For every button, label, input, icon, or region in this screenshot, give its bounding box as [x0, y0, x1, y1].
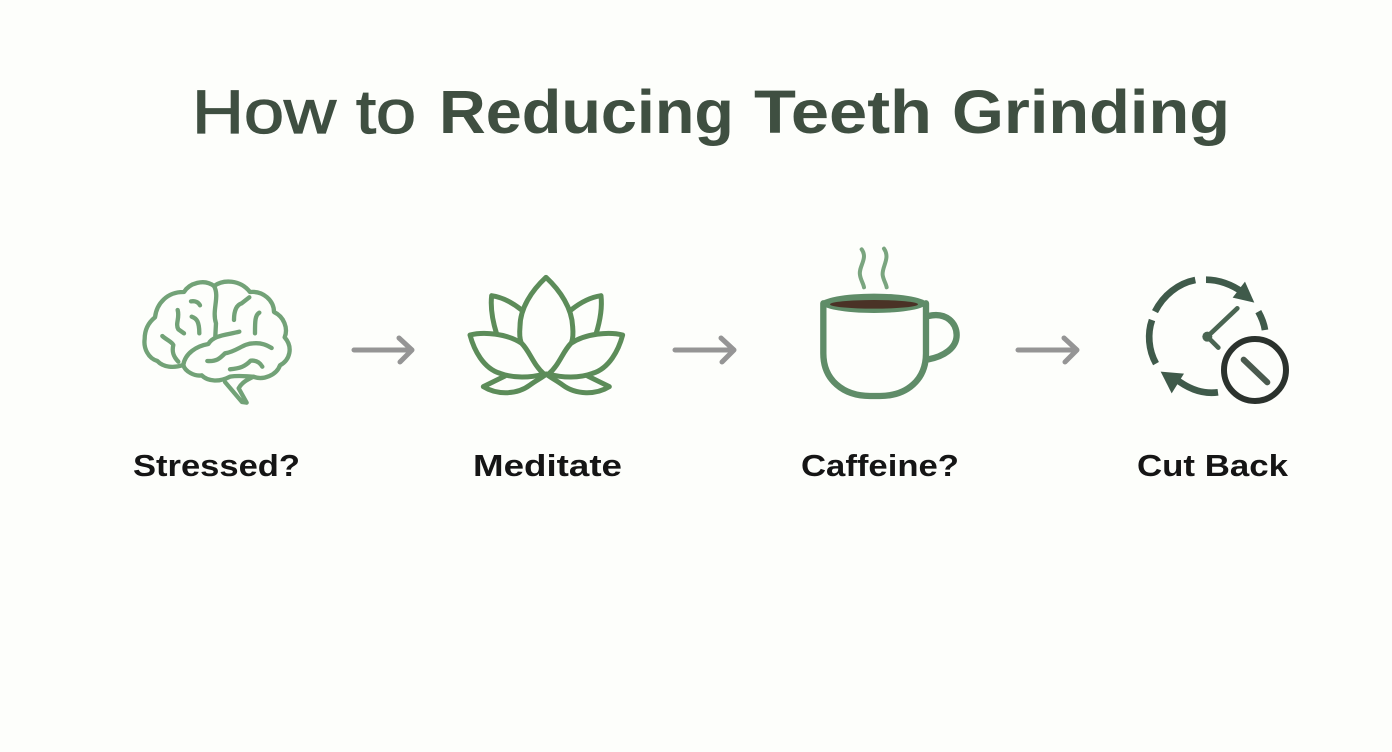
coffee: [830, 300, 918, 309]
title: [192, 78, 1230, 146]
cup rim: [821, 294, 927, 313]
title: Grinding: [952, 78, 1230, 146]
icon: coffee cup: [821, 249, 957, 396]
steam: [860, 249, 887, 287]
icon: lotus: [470, 277, 623, 393]
prohibition circle: [1224, 339, 1286, 401]
icon: clock cycle with prohibition sign: [1149, 280, 1286, 401]
arrow: lotus to cup: [675, 338, 734, 362]
label: Cut Back: Cut Back: [1137, 448, 1289, 483]
icon: brain: [144, 282, 290, 403]
label: Meditate: Meditate: [473, 448, 622, 483]
dashed arc arrows: [1149, 280, 1265, 393]
label: Stressed?: Stressed?: [133, 448, 300, 483]
title: Teeth: [754, 78, 932, 146]
title: Reducing: [439, 78, 734, 146]
title: How to: [192, 78, 416, 146]
clock hands: [1207, 308, 1237, 348]
cup handle: [928, 315, 957, 359]
cup body: [823, 303, 926, 396]
arrow: cup to clock: [1018, 338, 1077, 362]
label: Caffeine?: Caffeine?: [801, 448, 959, 483]
arrow: brain to lotus: [354, 338, 412, 362]
